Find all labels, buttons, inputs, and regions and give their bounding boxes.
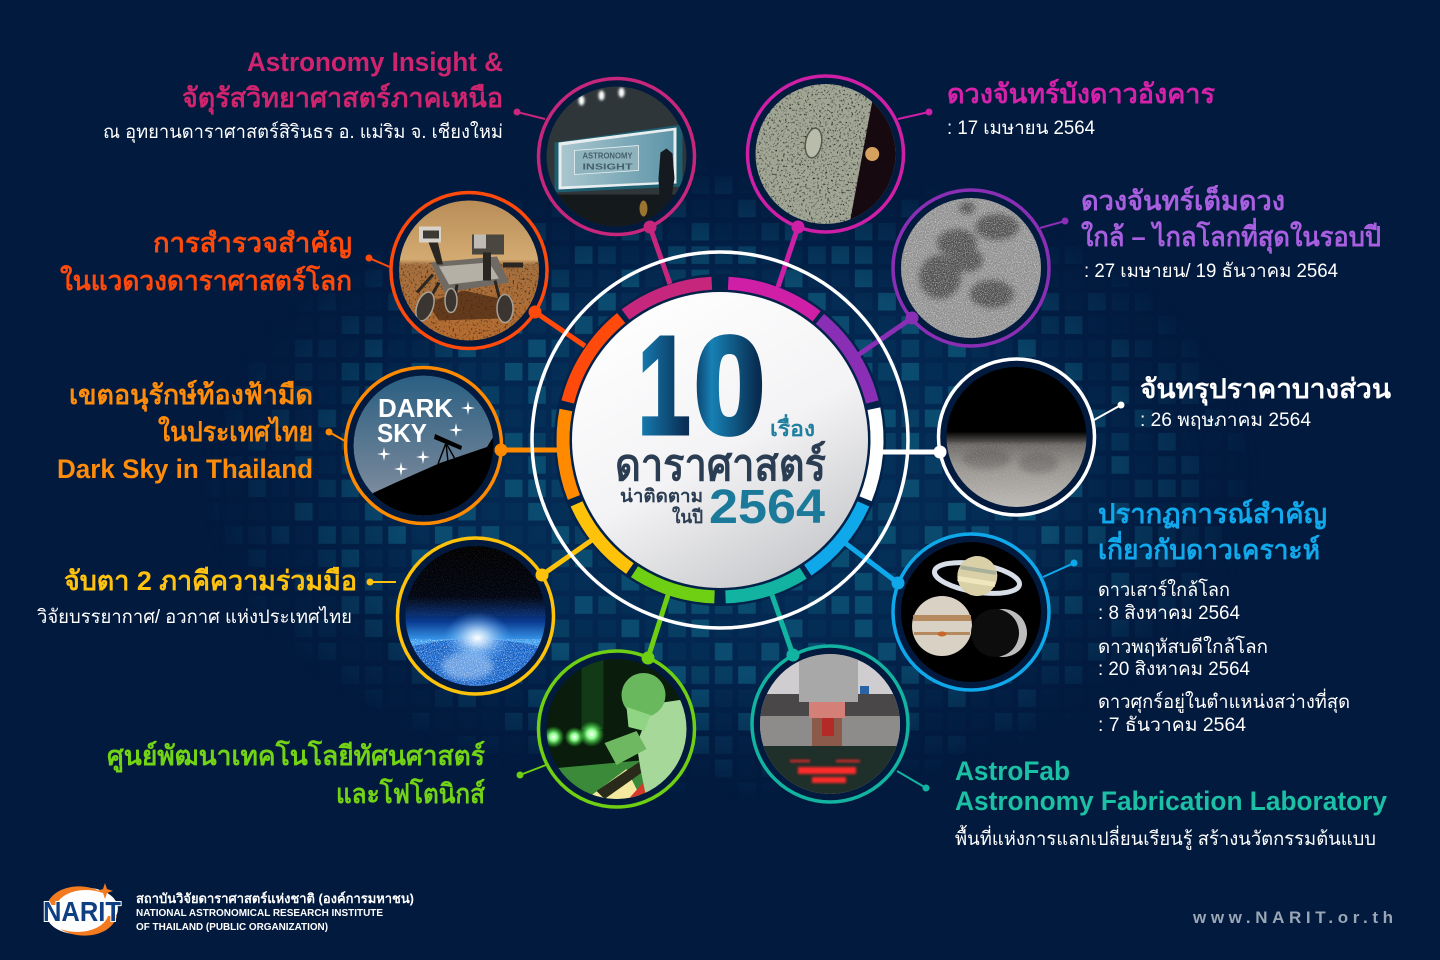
text: planetary events: : 7 ธันวาคม 2564: [1098, 715, 1246, 736]
text: Astronomy Insight: [103, 47, 503, 144]
text: AstroFab: [955, 756, 1387, 850]
photo: Dark Sky logo: SKY: [377, 418, 427, 448]
text: photonics centre: [107, 739, 485, 809]
hub title: น่าติดตาม ในปี: [620, 486, 703, 527]
photo: AstroFab laser cutter: [752, 646, 908, 802]
text: planetary events: ดาวศุกร์อยู่ในตำแหน่งสว่างที่สุด: [1098, 688, 1350, 714]
text: planetary events: [1098, 498, 1350, 736]
footer: institute name: [136, 891, 414, 933]
text: full moon: [1081, 183, 1381, 282]
photo: photonics lab: [538, 651, 694, 807]
footer: website: www.NARIT.or.th: [1192, 908, 1393, 927]
leader lines with end dots: [326, 108, 1124, 792]
hub title: น่าติดตาม ในปี: น่าติดตาม: [620, 486, 703, 506]
hub white disc: [572, 292, 868, 588]
text: space exploration: ในแวดวงดาราศาสตร์โลก: [60, 264, 352, 296]
photo: Mars rover: [391, 192, 547, 348]
hub title: 2564: 2564: [709, 481, 825, 534]
connector end dots: [494, 220, 946, 664]
footer: institute name: สถาบันวิจัยดาราศาสตร์แห่งชาติ (องค์การมหาชน): [136, 891, 414, 906]
hub title: น่าติดตาม ในปี: ในปี: [672, 506, 703, 527]
text: dark sky: ในประเทศไทย: [158, 416, 313, 447]
text: planetary events: ปรากฏการณ์สำคัญ: [1098, 498, 1327, 530]
text: photonics centre: และโฟโตนิกส์: [336, 777, 485, 809]
text: moon occults Mars: ดวงจันทร์บังดาวอังคาร: [947, 78, 1215, 109]
photo: Astronomy Insight billboard: ASTRONOMY: [582, 150, 633, 160]
photo: Astronomy Insight billboard: INSIGHT: [582, 162, 634, 172]
text: planetary events: ดาวเสาร์ใกล้โลก: [1098, 578, 1230, 601]
text: planetary events: ดาวพฤหัสบดีใกล้โลก: [1098, 635, 1268, 658]
text: two partners: วิจัยบรรยากาศ/ อวกาศ แห่งประเทศไทย: [37, 606, 352, 628]
hub: central circle: [532, 252, 908, 628]
text: dark sky: เขตอนุรักษ์ท้องฟ้ามืด: [69, 379, 313, 412]
connector lines from hub to photos: [501, 227, 940, 658]
text: photonics centre: ศูนย์พัฒนาเทคโนโลยีทัศนศาสตร์: [107, 739, 485, 773]
text: Astronomy Insight: ณ อุทยานดาราศาสตร์สิรินธร อ. แม่ริม จ. เชียงใหม่: [103, 121, 503, 144]
photo: Saturn Jupiter Venus: [893, 534, 1049, 690]
hub title: 10: [638, 309, 765, 463]
photo: Dark Sky logo: [346, 368, 502, 524]
text: AstroFab: AstroFab: [955, 756, 1070, 786]
photo: full moon: [893, 190, 1049, 346]
footer: institute name: OF THAILAND (PUBLIC ORGANIZATION): [136, 922, 328, 933]
hub segmented colour ring: [563, 283, 877, 597]
text: dark sky: Dark Sky in Thailand: [57, 454, 313, 484]
text: moon occults Mars: [947, 78, 1215, 139]
text: partial lunar eclipse: : 26 พฤษภาคม 2564: [1140, 410, 1311, 431]
hub title: 10: 1: [638, 309, 690, 463]
text: Astronomy Insight: จัตุรัสวิทยาศาสตร์ภาคเหนือ: [182, 82, 503, 115]
text: full moon: ดวงจันทร์เต็มดวง: [1081, 183, 1285, 216]
logo: NARIT: NARIT: [43, 896, 121, 927]
text: partial lunar eclipse: จันทรุปราคาบางส่วน: [1140, 374, 1392, 406]
text: two partners: [37, 566, 357, 628]
text: AstroFab: Astronomy Fabrication Laboratory: [955, 786, 1387, 816]
text: partial lunar eclipse: [1140, 374, 1392, 431]
text: AstroFab: พื้นที่แห่งการแลกเปลี่ยนเรียนรู้ สร้างนวัตกรรมต้นแบบ: [955, 825, 1376, 850]
photo: Earth from space: [398, 538, 554, 694]
text: full moon: : 27 เมษายน/ 19 ธันวาคม 2564: [1084, 261, 1338, 282]
logo: NARIT: [43, 883, 121, 938]
text: full moon: ใกล้ – ไกลโลกที่สุดในรอบปี: [1081, 217, 1381, 254]
photo: Astronomy Insight billboard: [538, 78, 694, 234]
text: space exploration: การสำรวจสำคัญ: [153, 228, 352, 259]
text: dark sky: [57, 379, 313, 484]
text: planetary events: : 20 สิงหาคม 2564: [1098, 659, 1250, 680]
photo: Dark Sky logo: DARK: [378, 393, 453, 423]
text: planetary events: : 8 สิงหาคม 2564: [1098, 603, 1240, 624]
text: planetary events: เกี่ยวกับดาวเคราะห์: [1098, 530, 1320, 565]
photo: moon occulting Mars: [748, 76, 904, 232]
hub title: เรื่อง: เรื่อง: [770, 413, 815, 441]
text: Astronomy Insight: Astronomy Insight &: [247, 47, 503, 77]
text: space exploration: [60, 228, 352, 296]
text: two partners: จับตา 2 ภาคีความร่วมมือ: [64, 566, 357, 596]
hub title: 10: 0: [694, 309, 765, 463]
text: moon occults Mars: : 17 เมษายน 2564: [947, 118, 1095, 139]
photo: partial lunar eclipse: [938, 359, 1094, 515]
hub title: ดาราศาสตร์: ดาราศาสตร์: [615, 440, 826, 490]
footer: institute name: NATIONAL ASTRONOMICAL RESEARCH INSTITUTE: [136, 908, 383, 919]
